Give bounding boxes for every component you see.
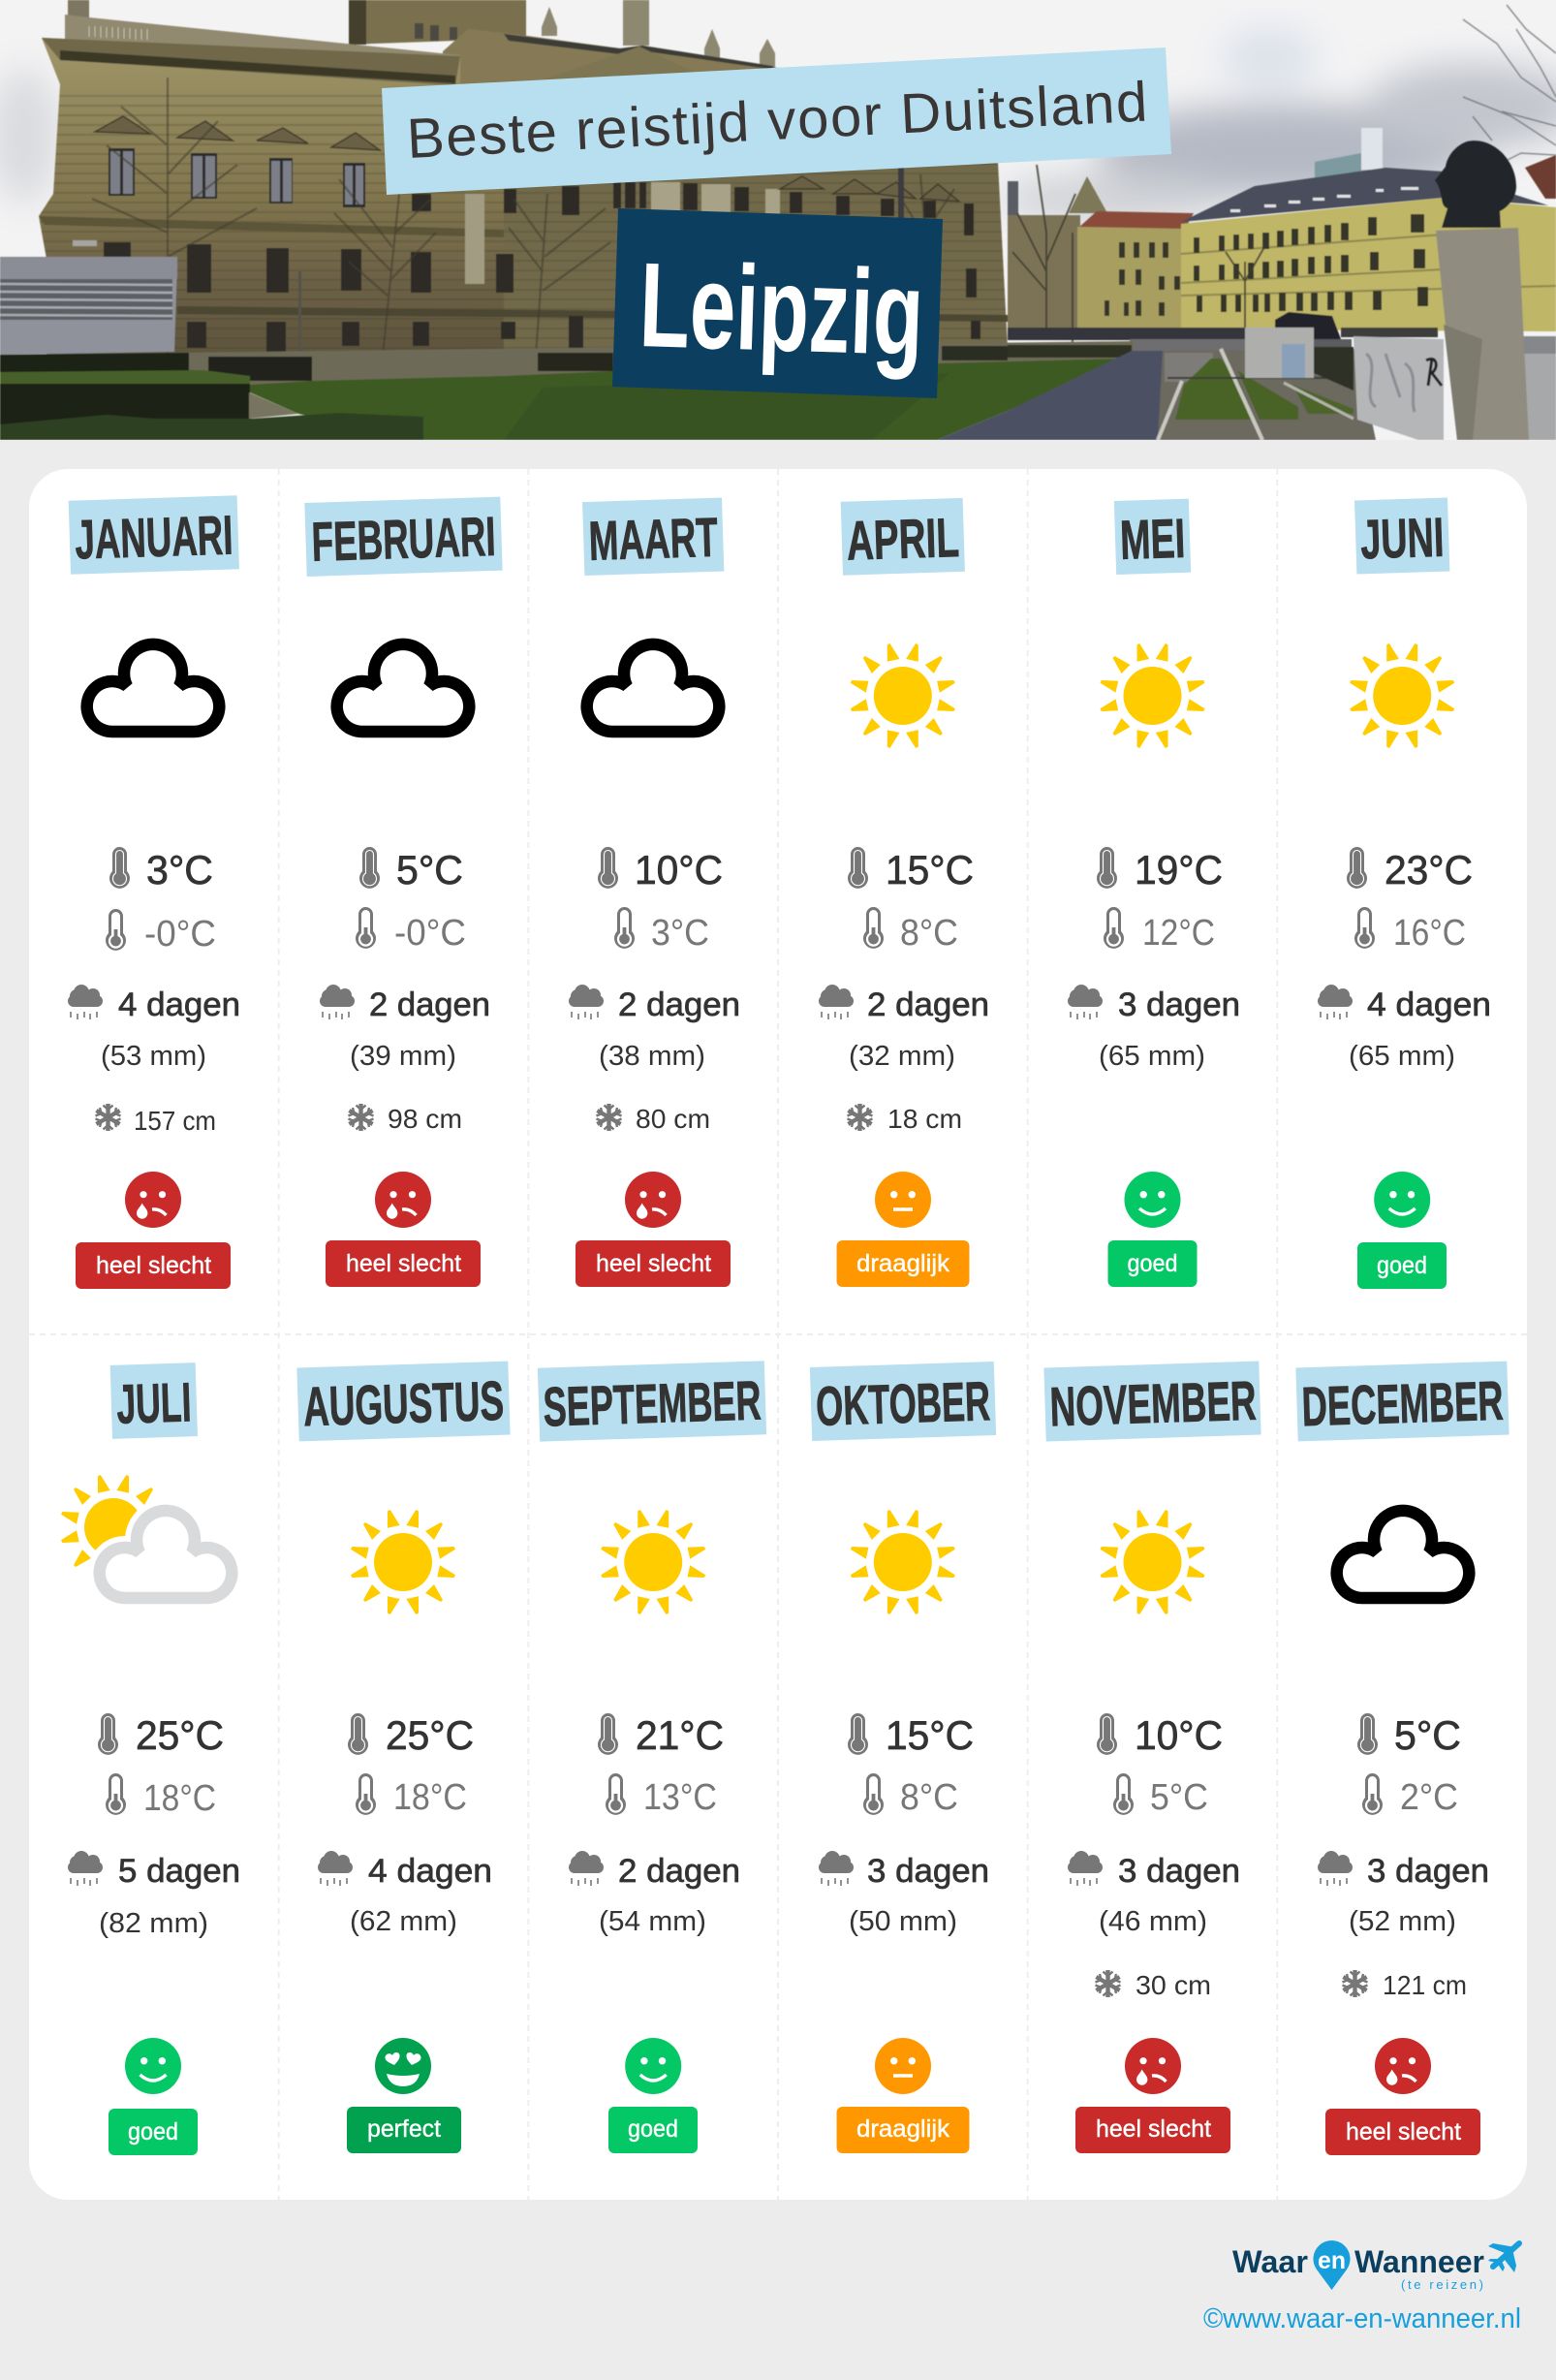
month tag: NOVEMBER: [1049, 1370, 1258, 1438]
rating: heel slecht: heel slecht: [1346, 2118, 1461, 2145]
cars and van: [1008, 328, 1245, 340]
high temperature: [359, 847, 463, 892]
low temperature: 2°C: [1400, 1777, 1458, 1818]
ground strip and grass: [174, 341, 1134, 388]
low temperature: [863, 907, 958, 954]
upper windows: [109, 148, 365, 207]
month tag: [582, 498, 724, 576]
high temperature: 23°C: [1385, 847, 1473, 892]
city banner: Leipzig: Leipzig: [638, 238, 925, 381]
high temperature: [598, 847, 723, 892]
month tag: [538, 1361, 766, 1442]
month tag: [1114, 499, 1191, 575]
month tag: [304, 497, 503, 577]
rating: goed: [608, 2107, 698, 2153]
month: november: [1043, 1362, 1261, 2153]
high temperature: 5°C: [1394, 1712, 1461, 1758]
rating: draaglijk: draaglijk: [856, 2115, 950, 2143]
icon: in-love smiley: [375, 2038, 431, 2094]
rain days: [819, 1851, 989, 1890]
rainfall: (65 mm): [1099, 1041, 1205, 1072]
wall: [1354, 336, 1444, 440]
month tag: MAART: [588, 507, 719, 573]
high temperature: 3°C: [146, 847, 213, 892]
rating: goed: goed: [628, 2115, 678, 2143]
snowfall: 121 cm: [1383, 1970, 1467, 2000]
rain days: 4 dagen: [118, 986, 240, 1023]
month tag: APRIL: [846, 507, 960, 573]
rain days: 2 dagen: [369, 986, 490, 1023]
rainfall: (39 mm): [350, 1041, 456, 1072]
low temperature: [106, 1773, 216, 1819]
rating: heel slecht: heel slecht: [1096, 2115, 1211, 2143]
high temperature: 10°C: [1135, 1712, 1223, 1758]
low temperature: [356, 907, 466, 954]
title banner: [382, 47, 1171, 195]
low temperature: 18°C: [143, 1778, 216, 1819]
low temperature: -0°C: [394, 913, 466, 954]
month: oktober: [810, 1362, 996, 2153]
high temperature: 5°C: [396, 847, 463, 892]
low temperature: 8°C: [900, 1777, 958, 1818]
icon: cloud: [87, 644, 219, 732]
low temperature: [356, 1773, 467, 1818]
month tag: OKTOBER: [815, 1370, 991, 1438]
rating: heel slecht: [1325, 2109, 1480, 2155]
rain days: [318, 1851, 492, 1890]
facade: [39, 38, 504, 368]
high temperature: [1097, 1712, 1223, 1758]
rating: goed: goed: [1128, 1250, 1178, 1277]
rating: heel slecht: [1075, 2107, 1230, 2153]
icon: very bad smiley: [1375, 2038, 1431, 2094]
icon: sun: [1350, 643, 1454, 748]
high temperature: 21°C: [636, 1712, 724, 1758]
snowfall: [349, 1104, 462, 1134]
high temperature: [598, 1712, 724, 1758]
rainfall: (38 mm): [599, 1041, 705, 1072]
rating: heel slecht: [326, 1240, 481, 1287]
low temperature: [606, 1773, 717, 1818]
high temperature: [98, 1712, 224, 1758]
rainfall: (62 mm): [350, 1906, 457, 1937]
icon: map pin with "en": [1313, 2240, 1351, 2290]
icon: neutral smiley: [875, 1172, 931, 1228]
icon: sun: [1101, 643, 1205, 748]
rating: goed: [109, 2109, 198, 2155]
bare trees on facade: [92, 78, 954, 356]
title banner: Beste reistijd voor Duitsland: [405, 71, 1149, 171]
rating: heel slecht: [576, 1240, 731, 1287]
icon: happy smiley: [125, 2038, 181, 2094]
snowfall: 98 cm: [388, 1104, 462, 1134]
rating: goed: goed: [128, 2118, 178, 2145]
icon: map pin with "en": en: [1318, 2247, 1346, 2274]
rainfall: (32 mm): [849, 1041, 955, 1072]
icon: sun: [351, 1510, 455, 1614]
month tag: JANUARI: [74, 504, 233, 572]
month: juni: [1318, 498, 1491, 1289]
logo: Waar en Wanneer: [1232, 2240, 1519, 2292]
snowfall: 30 cm: [1136, 1970, 1211, 2000]
rating: heel slecht: [76, 1242, 231, 1289]
rain days: 4 dagen: [1367, 986, 1491, 1023]
rain days: 2 dagen: [867, 986, 989, 1023]
month: januari: [68, 495, 240, 1289]
rain days: 3 dagen: [1118, 986, 1240, 1023]
icon: happy smiley: [625, 2038, 681, 2094]
icon: airplane: [1488, 2243, 1519, 2272]
logo: Waar en Wanneer: (te reizen): [1401, 2277, 1483, 2292]
city banner: Leipzig: [612, 208, 943, 398]
icon: happy smiley: [1374, 1172, 1430, 1228]
low temperature: [1113, 1773, 1208, 1818]
rainfall: (54 mm): [599, 1906, 706, 1937]
rating: heel slecht: heel slecht: [346, 1250, 461, 1277]
rain days: 3 dagen: [867, 1853, 989, 1890]
rainfall: (82 mm): [99, 1908, 208, 1939]
rating: goed: goed: [1377, 1252, 1427, 1279]
rain days: 2 dagen: [618, 1853, 740, 1890]
icon: cloud: [587, 644, 719, 732]
month: juli: [61, 1362, 240, 2155]
month tag: [296, 1362, 511, 1441]
road and paths: [937, 351, 1182, 440]
rain days: [569, 1851, 740, 1890]
low temperature: 5°C: [1150, 1777, 1208, 1818]
high temperature: 25°C: [136, 1712, 224, 1758]
month: augustus: [296, 1362, 511, 2153]
right buildings: [1008, 181, 1018, 220]
icon: very bad smiley: [125, 1172, 181, 1228]
rating: draaglijk: draaglijk: [856, 1250, 950, 1277]
rainfall: (65 mm): [1349, 1041, 1455, 1072]
month: februari: [304, 497, 503, 1287]
finials: [542, 0, 775, 68]
high temperature: [1097, 847, 1223, 892]
month tag: AUGUSTUS: [302, 1370, 505, 1438]
month tag: JULI: [115, 1371, 192, 1436]
high temperature: 15°C: [886, 1712, 974, 1758]
rainfall: (52 mm): [1349, 1906, 1456, 1937]
month tag: [810, 1362, 996, 1441]
rating: draaglijk: [837, 1240, 969, 1287]
panel: climate calendar card: [29, 469, 1527, 2200]
month: september: [538, 1361, 766, 2153]
snowfall: 157 cm: [134, 1106, 216, 1136]
pedestal and bust: [1436, 228, 1529, 440]
snowfall: [847, 1104, 962, 1134]
icon: sun behind grey cloud: [61, 1475, 232, 1598]
month tag: [69, 495, 239, 575]
high temperature: [109, 847, 213, 892]
rating: perfect: [347, 2107, 461, 2153]
rain days: 2 dagen: [618, 986, 740, 1023]
rain days: [819, 985, 989, 1023]
rating: heel slecht: heel slecht: [96, 1252, 211, 1279]
rain days: 3 dagen: [1118, 1853, 1240, 1890]
snowfall: 18 cm: [887, 1104, 962, 1134]
logo: Waar en Wanneer: Wanneer: [1354, 2244, 1484, 2279]
low temperature: [614, 907, 709, 954]
low temperature: 12°C: [1142, 913, 1215, 954]
month tag: FEBRUARI: [311, 506, 497, 574]
snowfall: 80 cm: [636, 1104, 710, 1134]
rainfall: (50 mm): [849, 1906, 957, 1937]
balustrade: [64, 14, 460, 56]
pediments: [95, 116, 959, 202]
high temperature: [1357, 1712, 1461, 1758]
rain days: [1068, 1851, 1240, 1890]
snowfall: [597, 1104, 710, 1134]
rain days: 3 dagen: [1367, 1853, 1489, 1890]
icon: sun: [851, 1510, 955, 1614]
rain days: [569, 985, 740, 1023]
rating: draaglijk: [837, 2107, 969, 2153]
icon: cloud: [1337, 1511, 1469, 1598]
low temperature: [863, 1773, 958, 1818]
low temperature: 8°C: [900, 913, 958, 954]
rainfall: (46 mm): [1099, 1906, 1207, 1937]
rain days: [1068, 985, 1240, 1023]
rain days: [68, 985, 240, 1023]
rating: goed: [1108, 1240, 1198, 1287]
rain days: [1318, 1851, 1489, 1890]
month: maart: [569, 498, 740, 1287]
month tag: [110, 1362, 198, 1439]
month: mei: [1068, 499, 1240, 1287]
icon: happy smiley: [1124, 1172, 1180, 1228]
icon: very bad smiley: [625, 1172, 681, 1228]
rain days: [320, 985, 490, 1023]
icon: sun: [601, 1510, 705, 1614]
low temperature: 13°C: [643, 1777, 717, 1818]
snowfall: [95, 1104, 216, 1136]
snowfall: [1095, 1970, 1211, 2000]
high temperature: [1347, 847, 1473, 892]
low temperature: 3°C: [651, 913, 709, 954]
low temperature: [1362, 1773, 1458, 1818]
month tag: [1354, 498, 1449, 574]
month tag: JUNI: [1359, 507, 1445, 571]
month tag: [841, 498, 965, 576]
rain days: 4 dagen: [368, 1853, 492, 1890]
high temperature: 19°C: [1135, 847, 1223, 892]
low temperature: [1104, 907, 1215, 954]
high temperature: 25°C: [386, 1712, 474, 1758]
icon: very bad smiley: [1125, 2038, 1181, 2094]
low temperature: [106, 909, 216, 955]
icon: cloud: [337, 644, 469, 732]
high temperature: [848, 847, 974, 892]
month tag: MEI: [1119, 508, 1186, 572]
month tag: [1043, 1362, 1261, 1441]
snowfall: [1343, 1970, 1467, 2000]
left sky finial and tower: [67, 0, 90, 18]
icon: very bad smiley: [375, 1172, 431, 1228]
rain days: [68, 1851, 240, 1890]
month tag: SEPTEMBER: [543, 1369, 762, 1439]
high temperature: 10°C: [635, 847, 723, 892]
rainfall: (53 mm): [101, 1041, 206, 1072]
roofline: [443, 29, 1008, 368]
rain days: 5 dagen: [118, 1853, 240, 1890]
rain days: [1318, 985, 1491, 1023]
logo: Waar en Wanneer: Waar: [1232, 2244, 1308, 2279]
low temperature: -0°C: [144, 914, 216, 955]
rating: heel slecht: heel slecht: [596, 1250, 711, 1277]
icon: sun: [1101, 1510, 1205, 1614]
icon: sun: [851, 643, 955, 748]
rating: goed: [1357, 1242, 1447, 1289]
month: april: [819, 498, 989, 1287]
high temperature: [348, 1712, 474, 1758]
grey building left: [0, 279, 178, 356]
high temperature: [848, 1712, 974, 1758]
low temperature: 16°C: [1393, 913, 1466, 954]
month: december: [1295, 1362, 1509, 2155]
icon: neutral smiley: [875, 2038, 931, 2094]
high temperature: 15°C: [886, 847, 974, 892]
header photo: Leipzig court building and square: [0, 0, 1556, 440]
low temperature: [1354, 907, 1466, 954]
rating: perfect: perfect: [367, 2115, 441, 2143]
low temperature: 18°C: [393, 1777, 467, 1818]
copyright url: ©www.waar-en-wanneer.nl: [1203, 2303, 1521, 2334]
